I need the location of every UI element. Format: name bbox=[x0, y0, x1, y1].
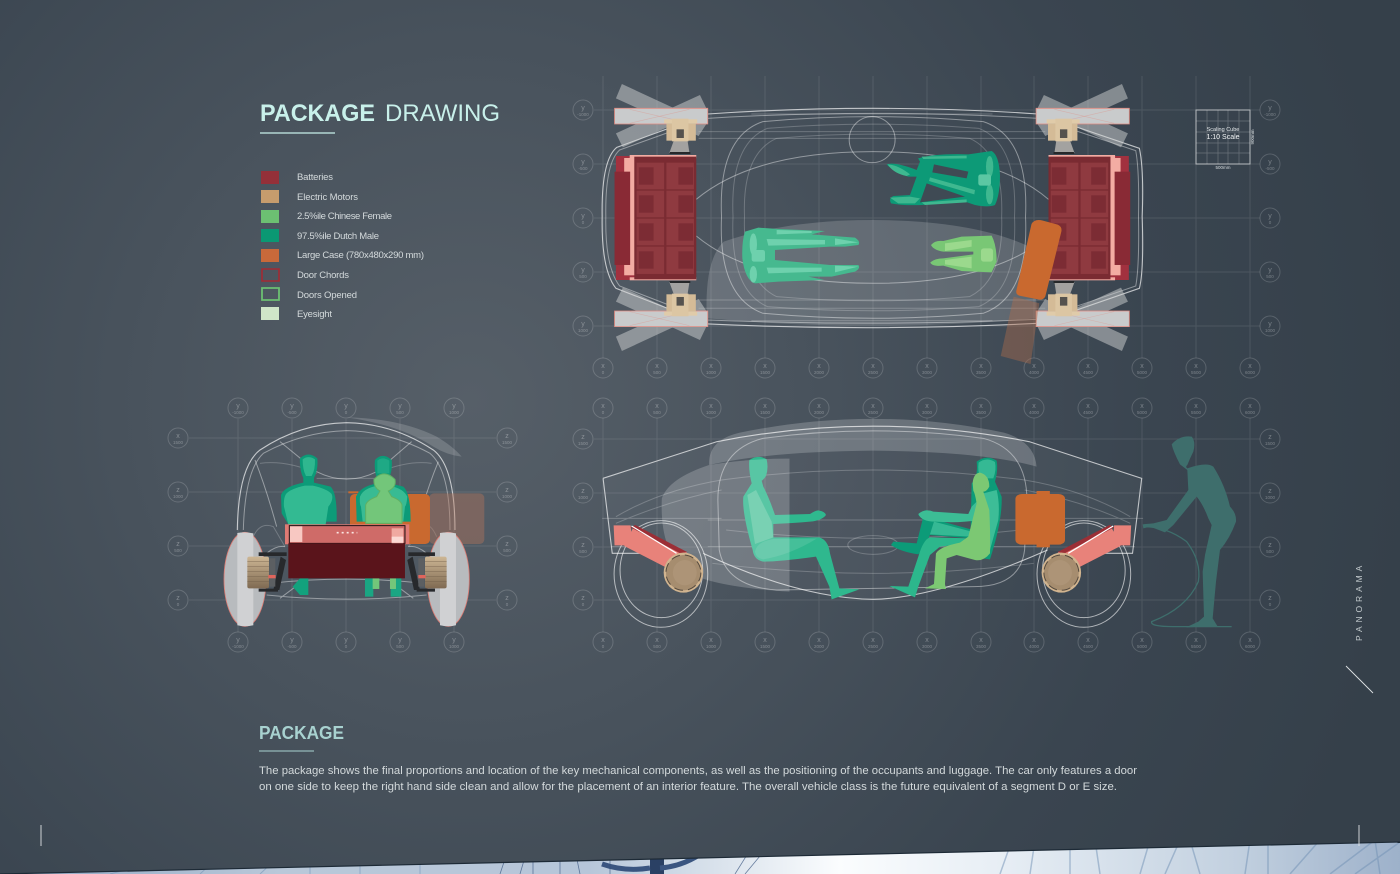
axis labels: top view: x bbox=[1248, 363, 1252, 370]
axis labels: side view: x bbox=[871, 403, 875, 410]
canopy ghost bbox=[709, 419, 1037, 467]
legend: dutch male: 97.5%ile Dutch Male bbox=[297, 231, 379, 242]
package heading: PACKAGE bbox=[259, 723, 344, 743]
axis labels: side view: 1000 bbox=[1265, 495, 1276, 500]
corner: front left wheel, door sweep, motor bbox=[615, 84, 708, 154]
axis labels: side view: z bbox=[581, 434, 585, 441]
axis labels: side view: x bbox=[1140, 637, 1144, 644]
axis labels: side view: x bbox=[763, 403, 767, 410]
axis labels: side view: x bbox=[925, 637, 929, 644]
axis labels: side view: x bbox=[1194, 637, 1198, 644]
axis labels: top view: y bbox=[1268, 213, 1272, 220]
axis labels: side view: 0 bbox=[582, 602, 585, 607]
spoiler ghost bbox=[347, 417, 462, 457]
axis labels: side view: x bbox=[1140, 403, 1144, 410]
axis labels: side view: 3500 bbox=[976, 410, 987, 415]
axis labels: side view: x bbox=[925, 403, 929, 410]
top view drawing bbox=[602, 84, 1143, 364]
axis labels: front view: 500 bbox=[396, 410, 404, 415]
axis labels: side view: 4500 bbox=[1083, 410, 1094, 415]
legend: eyesight bbox=[261, 307, 332, 320]
axis labels: side view: 5000 bbox=[1137, 410, 1148, 415]
axis labels: side view: x bbox=[979, 637, 983, 644]
axis labels: top view: x bbox=[1194, 363, 1198, 370]
top view body and mechanicals bbox=[602, 84, 1143, 364]
side view drawing bbox=[602, 419, 1236, 627]
axis labels: front view bbox=[168, 398, 517, 652]
axis labels: side view: 3500 bbox=[976, 644, 987, 649]
axis labels: top view: -500 bbox=[578, 166, 588, 171]
female occupant bbox=[930, 236, 997, 272]
corner: rear right wheel, door sweep, motor bbox=[1036, 281, 1129, 351]
axis labels: side view: x bbox=[1032, 637, 1036, 644]
axis labels: front view: y bbox=[236, 403, 240, 410]
axis labels: side view: z bbox=[1268, 595, 1272, 602]
axis labels: front view: 1500 bbox=[502, 440, 513, 445]
axis labels: side view: 500 bbox=[1266, 549, 1274, 554]
title: PACKAGE bbox=[260, 100, 375, 127]
axis labels: front view: z bbox=[176, 541, 180, 548]
axis labels: top view: 6000 bbox=[1245, 370, 1256, 375]
legend: batteries: Batteries bbox=[297, 172, 333, 183]
axis labels: side view: x bbox=[871, 637, 875, 644]
axis labels: front view: z bbox=[176, 595, 180, 602]
legend: door chords: Door Chords bbox=[297, 270, 349, 281]
legend: door chords bbox=[262, 269, 349, 281]
door case ghost bbox=[1001, 297, 1039, 364]
wheel left bbox=[224, 532, 269, 626]
legend: large case: Large Case (780x480x290 mm) bbox=[297, 250, 424, 261]
axis labels: top view: 1500 bbox=[760, 370, 771, 375]
large case bbox=[348, 491, 430, 544]
axis labels: side view: x bbox=[817, 637, 821, 644]
axis labels: side view: x bbox=[817, 403, 821, 410]
axis labels: top view: 1000 bbox=[1265, 328, 1276, 333]
large case bbox=[1016, 220, 1061, 300]
rear male occupant bbox=[889, 458, 1002, 597]
axis labels: front view: z bbox=[505, 541, 509, 548]
axis labels: front view: -1000 bbox=[232, 644, 244, 649]
section label: panorama: PANORAMA bbox=[1354, 562, 1364, 641]
axis labels: top view: y bbox=[581, 321, 585, 328]
axis labels: front view: 0 bbox=[177, 602, 180, 607]
legend: electric motors bbox=[261, 190, 358, 203]
axis labels: side view: 2000 bbox=[814, 644, 825, 649]
axis labels: top view: 0 bbox=[582, 220, 585, 225]
motor arm rear bbox=[1042, 525, 1131, 593]
axis labels: front view: y bbox=[344, 637, 348, 644]
axis labels: side view: x bbox=[979, 403, 983, 410]
suspension left bbox=[259, 552, 287, 592]
axis labels: side view: z bbox=[1268, 434, 1272, 441]
axis labels: side view: x bbox=[1086, 403, 1090, 410]
axis labels: front view: 0 bbox=[345, 410, 348, 415]
car body outlines bbox=[602, 426, 1143, 599]
axis labels: side view: 1500 bbox=[1265, 441, 1276, 446]
axis labels: top view: 500 bbox=[579, 274, 587, 279]
axis labels: top view: x bbox=[1032, 363, 1036, 370]
axis labels: top view: x bbox=[1086, 363, 1090, 370]
axis labels: side view: x bbox=[1248, 637, 1252, 644]
legend: chinese female: 2.5%ile Chinese Female bbox=[297, 211, 392, 222]
axis labels: side view bbox=[573, 398, 1280, 652]
axis labels: top view: -1000 bbox=[1264, 112, 1276, 117]
axis labels: front view: z bbox=[505, 433, 509, 440]
axis labels: top view: y bbox=[581, 159, 585, 166]
axis labels: side view: x bbox=[601, 637, 605, 644]
axis labels: front view: 500 bbox=[503, 548, 511, 553]
female occupant bbox=[366, 474, 402, 589]
axis labels: side view: 1500 bbox=[760, 410, 771, 415]
axis labels: front view: y bbox=[290, 637, 294, 644]
axis labels: front view: y bbox=[398, 403, 402, 410]
axis labels: front view: z bbox=[505, 487, 509, 494]
axis labels: front view: y bbox=[290, 403, 294, 410]
axis labels: side view: 3000 bbox=[922, 644, 933, 649]
axis labels: top view: 2500 bbox=[868, 370, 879, 375]
axis labels: side view: 6000 bbox=[1245, 410, 1256, 415]
axis labels: side view: 2500 bbox=[868, 644, 879, 649]
corner tick: right bbox=[1358, 825, 1360, 846]
legend: large case bbox=[261, 249, 424, 262]
side view occupants bbox=[743, 457, 1002, 599]
legend bbox=[261, 171, 424, 320]
axis labels: top view: x bbox=[871, 363, 875, 370]
eyesight dome bbox=[707, 220, 1037, 326]
axis labels: front view: z bbox=[176, 487, 180, 494]
axis labels: top view: x bbox=[601, 363, 605, 370]
axis labels: top view: x bbox=[817, 363, 821, 370]
scaling cube: 900mm bbox=[1250, 129, 1255, 145]
axis labels: front view: 500 bbox=[174, 548, 182, 553]
axis labels: front view: y bbox=[452, 637, 456, 644]
corner tick: left bbox=[40, 825, 42, 846]
axis labels: front view: z bbox=[505, 595, 509, 602]
description text bbox=[259, 765, 1137, 793]
axis labels: side view: 3000 bbox=[922, 410, 933, 415]
corner tick: diagonal bbox=[1346, 666, 1373, 693]
standing person silhouette bbox=[1143, 436, 1236, 627]
car outlines bbox=[237, 423, 455, 599]
axis labels: side view: x bbox=[655, 403, 659, 410]
battery right bbox=[1048, 155, 1130, 280]
grid: side view bbox=[594, 418, 1260, 632]
wheel right bbox=[425, 532, 469, 626]
legend: doors opened bbox=[262, 288, 357, 301]
legend: dutch male bbox=[261, 229, 379, 242]
front wheel outline bbox=[614, 521, 708, 627]
axis labels: side view: z bbox=[581, 595, 585, 602]
axis labels: side view: z bbox=[581, 488, 585, 495]
axis labels: side view: 0 bbox=[602, 410, 605, 415]
axis labels: top view: y bbox=[1268, 105, 1272, 112]
photo strip at bottom edge bbox=[0, 840, 1400, 874]
axis labels: front view: -500 bbox=[287, 644, 297, 649]
axis labels: top view: 3000 bbox=[922, 370, 933, 375]
male occupant left bbox=[281, 454, 337, 595]
front view drawing bbox=[224, 417, 484, 626]
axis labels: top view: x bbox=[925, 363, 929, 370]
axis labels: side view: x bbox=[601, 403, 605, 410]
legend: doors opened: Doors Opened bbox=[297, 290, 357, 301]
large case ghost bbox=[429, 493, 484, 544]
grid: front view bbox=[189, 419, 496, 632]
male occupant lower left bbox=[742, 228, 859, 283]
description text: The package shows the final proportions and location of the key mechanical components, as well as the positioning of the occupants and luggage. The car only features a door bbox=[259, 765, 1137, 777]
axis labels: top view: 500 bbox=[653, 370, 661, 375]
axis labels: side view: 4000 bbox=[1029, 410, 1040, 415]
side view body bbox=[602, 419, 1143, 627]
axis labels: top view: -500 bbox=[1265, 166, 1275, 171]
axis labels: front view: y bbox=[236, 637, 240, 644]
title: DRAWING bbox=[385, 100, 500, 127]
legend: eyesight: Eyesight bbox=[297, 309, 332, 320]
legend: batteries bbox=[261, 171, 333, 184]
axis labels: front view: 1000 bbox=[449, 644, 460, 649]
axis labels: side view: 1500 bbox=[760, 644, 771, 649]
suspension right bbox=[407, 552, 435, 592]
axis labels: side view: x bbox=[655, 637, 659, 644]
axis labels: top view: 500 bbox=[1266, 274, 1274, 279]
axis labels: side view: 500 bbox=[653, 644, 661, 649]
axis labels: front view: 500 bbox=[396, 644, 404, 649]
axis labels: side view: 1000 bbox=[578, 495, 589, 500]
corner: rear left wheel, door sweep, motor bbox=[615, 281, 708, 351]
front male occupant bbox=[743, 457, 859, 599]
scaling cube: Scaling Cube bbox=[1207, 127, 1239, 133]
axis labels: side view: 5500 bbox=[1191, 410, 1202, 415]
axis labels: front view: 1000 bbox=[502, 494, 513, 499]
rear wheel outline bbox=[1037, 521, 1131, 627]
axis labels: top view: -1000 bbox=[577, 112, 589, 117]
axis labels: side view: 2000 bbox=[814, 410, 825, 415]
axis labels: side view: 500 bbox=[579, 549, 587, 554]
axis labels: side view: x bbox=[1032, 403, 1036, 410]
axis labels: side view: x bbox=[709, 637, 713, 644]
motor arm front bbox=[614, 525, 703, 593]
axis labels: front view: 1000 bbox=[173, 494, 184, 499]
battery pack bbox=[285, 524, 409, 578]
axis labels: top view: 5500 bbox=[1191, 370, 1202, 375]
axis labels: front view: x bbox=[176, 433, 180, 440]
axis labels: top view: y bbox=[581, 105, 585, 112]
motors, arms and case bbox=[614, 491, 1131, 593]
axis labels: side view: x bbox=[709, 403, 713, 410]
axis labels: front view: 0 bbox=[345, 644, 348, 649]
axis labels: front view: -500 bbox=[287, 410, 297, 415]
axis labels: side view: x bbox=[1248, 403, 1252, 410]
axis labels: front view: 1000 bbox=[449, 410, 460, 415]
corner: front right wheel, door sweep, motor bbox=[1036, 84, 1129, 154]
axis labels: front view: y bbox=[398, 637, 402, 644]
scaling cube: 1:10 Scale bbox=[1206, 134, 1240, 141]
axis labels: top view: 1000 bbox=[578, 328, 589, 333]
axis labels: top view: x bbox=[709, 363, 713, 370]
package heading bbox=[259, 723, 344, 751]
axis labels: side view: 1000 bbox=[706, 410, 717, 415]
axis labels: side view: 0 bbox=[1269, 602, 1272, 607]
grid: top view bbox=[594, 76, 1260, 358]
axis labels: side view: z bbox=[1268, 542, 1272, 549]
axis labels: top view: 0 bbox=[602, 370, 605, 375]
legend: electric motors: Electric Motors bbox=[297, 192, 358, 203]
axis labels: top view: 5000 bbox=[1137, 370, 1148, 375]
battery left bbox=[615, 155, 696, 280]
axis labels: side view: 5000 bbox=[1137, 644, 1148, 649]
axis labels: side view: x bbox=[763, 637, 767, 644]
axis labels: front view: y bbox=[452, 403, 456, 410]
female occupant bbox=[925, 473, 990, 589]
axis labels: side view: 1000 bbox=[706, 644, 717, 649]
axis labels: top view: y bbox=[1268, 159, 1272, 166]
title bbox=[260, 100, 500, 133]
axis labels: side view: 1500 bbox=[578, 441, 589, 446]
axis labels: front view: 0 bbox=[506, 602, 509, 607]
axis labels: top view: x bbox=[763, 363, 767, 370]
axis labels: side view: z bbox=[581, 542, 585, 549]
axis labels: top view: 3500 bbox=[976, 370, 987, 375]
axis labels: side view: 4500 bbox=[1083, 644, 1094, 649]
scaling cube bbox=[1196, 110, 1255, 170]
axis labels: side view: 2500 bbox=[868, 410, 879, 415]
axis labels: front view: -1000 bbox=[232, 410, 244, 415]
axis labels: top view: y bbox=[581, 267, 585, 274]
axis labels: side view: z bbox=[1268, 488, 1272, 495]
axis labels: front view: 1500 bbox=[173, 440, 184, 445]
axis labels: top view: y bbox=[581, 213, 585, 220]
axis labels: side view: x bbox=[1194, 403, 1198, 410]
occupant eyesight ghost bbox=[662, 459, 789, 592]
axis labels: side view: x bbox=[1086, 637, 1090, 644]
axis labels: top view: 4500 bbox=[1083, 370, 1094, 375]
axis labels: top view: x bbox=[655, 363, 659, 370]
axis labels: front view: y bbox=[344, 403, 348, 410]
axis labels: side view: 6000 bbox=[1245, 644, 1256, 649]
axis labels: top view: 0 bbox=[1269, 220, 1272, 225]
body outlines bbox=[602, 108, 1143, 328]
male occupant top right bbox=[887, 151, 1000, 206]
scaling cube: 500mm bbox=[1215, 165, 1231, 170]
axis labels: top view: y bbox=[1268, 267, 1272, 274]
legend: chinese female bbox=[261, 210, 392, 223]
description text: on one side to keep the right hand side clean and allow for the placement of an interior feature. The overall vehicle class is the future equivalent of a segment D or E size. bbox=[259, 781, 1117, 793]
axis labels: top view: 4000 bbox=[1029, 370, 1040, 375]
axis labels: top view: 1000 bbox=[706, 370, 717, 375]
axis labels: side view: 5500 bbox=[1191, 644, 1202, 649]
axis labels: top view bbox=[573, 100, 1280, 378]
axis labels: top view: x bbox=[979, 363, 983, 370]
male occupant right bbox=[356, 456, 411, 597]
axis labels: side view: 500 bbox=[653, 410, 661, 415]
top view occupants bbox=[742, 151, 1000, 283]
axis labels: top view: x bbox=[1140, 363, 1144, 370]
axis labels: top view: y bbox=[1268, 321, 1272, 328]
axis labels: top view: 2000 bbox=[814, 370, 825, 375]
axis labels: side view: 4000 bbox=[1029, 644, 1040, 649]
large case bbox=[1015, 491, 1065, 547]
axis labels: side view: 0 bbox=[602, 644, 605, 649]
